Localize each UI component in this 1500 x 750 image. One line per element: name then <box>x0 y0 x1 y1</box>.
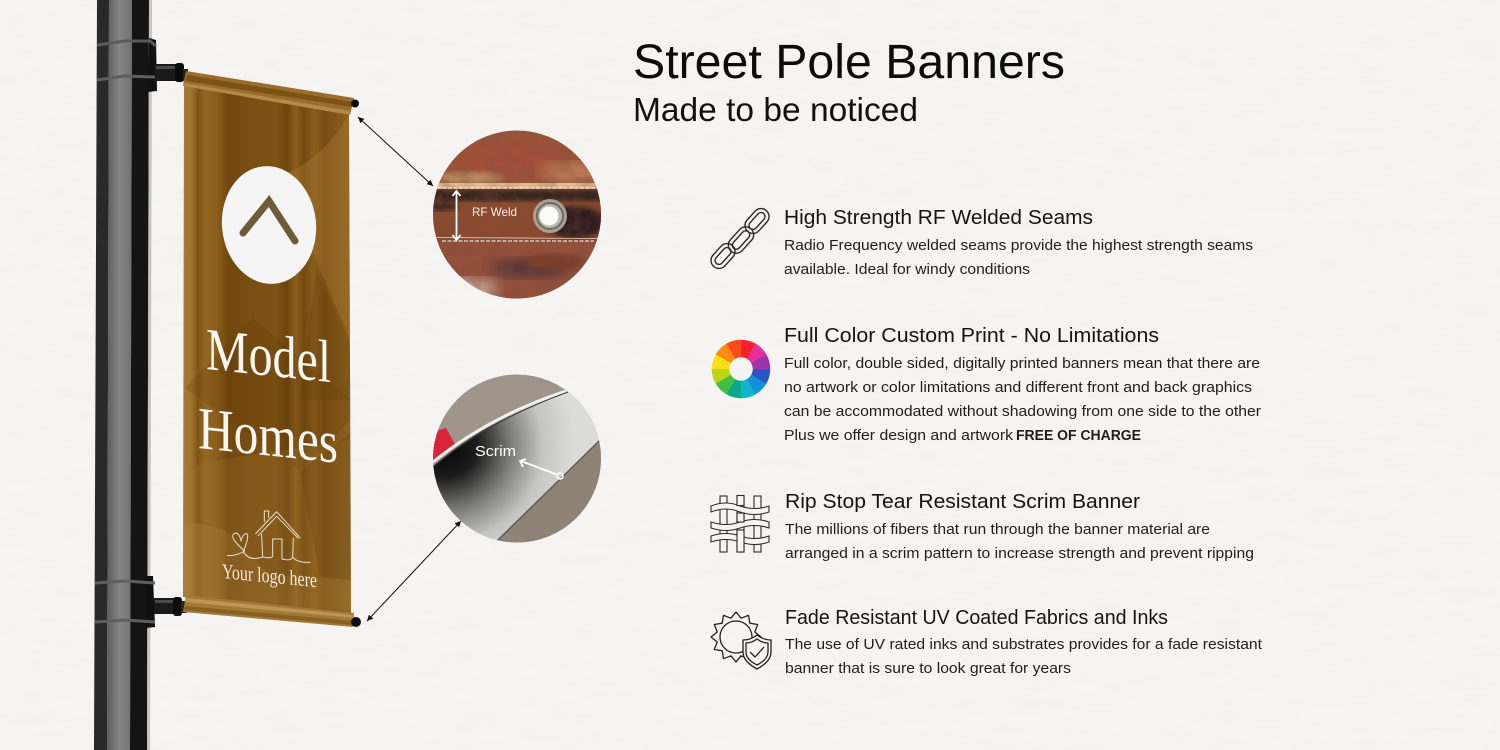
description: banner that is sure to look great for years <box>785 661 1071 677</box>
banner <box>180 71 361 627</box>
street pole <box>94 0 152 750</box>
your logo here: Your logo here <box>222 559 317 592</box>
description: FREE OF CHARGE <box>1016 428 1141 444</box>
icon: chain <box>708 205 772 272</box>
description: can be accommodated without shadowing from one side to the other <box>784 404 1261 420</box>
banner headline <box>198 316 338 477</box>
weld height arrow <box>452 191 460 240</box>
scrim label: Scrim <box>475 443 516 460</box>
top rod <box>183 71 354 115</box>
description <box>784 238 1253 278</box>
bottom rod <box>183 595 354 627</box>
grommet <box>533 199 567 233</box>
subtitle: Made to be noticed <box>633 91 918 128</box>
description: available. Ideal for windy conditions <box>784 262 1030 278</box>
banner headline: Homes <box>198 395 338 477</box>
description: no artwork or color limitations and different front and back graphics <box>784 380 1252 396</box>
icon: sun and shield <box>711 612 771 669</box>
description <box>785 522 1254 562</box>
arrow: bottom of banner to scrim detail <box>367 521 461 621</box>
description: arranged in a scrim pattern to increase strength and prevent ripping <box>785 546 1254 562</box>
description: The millions of fibers that run through the banner material are <box>785 522 1210 538</box>
heading: Full Color Custom Print - No Limitations <box>784 325 1159 347</box>
chevron mark <box>243 201 295 241</box>
detail circle: scrim <box>433 374 601 542</box>
logo circle <box>216 161 322 289</box>
heading: Rip Stop Tear Resistant Scrim Banner <box>785 491 1140 513</box>
RF Weld label: RF Weld <box>472 205 517 219</box>
arrow: top of banner to weld detail <box>358 117 433 186</box>
feature: full color print <box>713 325 1261 444</box>
description: Full color, double sided, digitally printed banners mean that there are <box>784 356 1260 372</box>
scrim pointer arrow <box>520 459 563 479</box>
description: Radio Frequency welded seams provide the highest strength seams <box>784 238 1253 254</box>
house and heart line logo <box>227 511 310 562</box>
scrim material edge <box>433 391 566 462</box>
feature: rip stop scrim <box>711 491 1254 562</box>
icon: color wheel <box>713 341 769 397</box>
description <box>784 356 1261 444</box>
description <box>785 637 1262 677</box>
title: Street Pole Banners <box>633 36 1065 89</box>
heading: High Strength RF Welded Seams <box>784 207 1093 229</box>
banner headline: Model <box>206 316 331 396</box>
heading: Fade Resistant UV Coated Fabrics and Inks <box>785 607 1168 629</box>
detail circle: RF weld <box>430 128 605 303</box>
bottom pole bracket <box>95 576 187 628</box>
banner fabric <box>180 80 355 620</box>
icon: woven scrim <box>711 496 769 552</box>
description: Plus we offer design and artwork <box>784 428 1014 444</box>
description: The use of UV rated inks and substrates provides for a fade resistant <box>785 637 1262 653</box>
weld seam lines <box>436 188 598 241</box>
rod end caps <box>351 100 361 627</box>
feature: RF welded seams <box>708 205 1253 278</box>
top pole bracket <box>97 38 188 92</box>
feature: UV coated <box>711 607 1262 677</box>
